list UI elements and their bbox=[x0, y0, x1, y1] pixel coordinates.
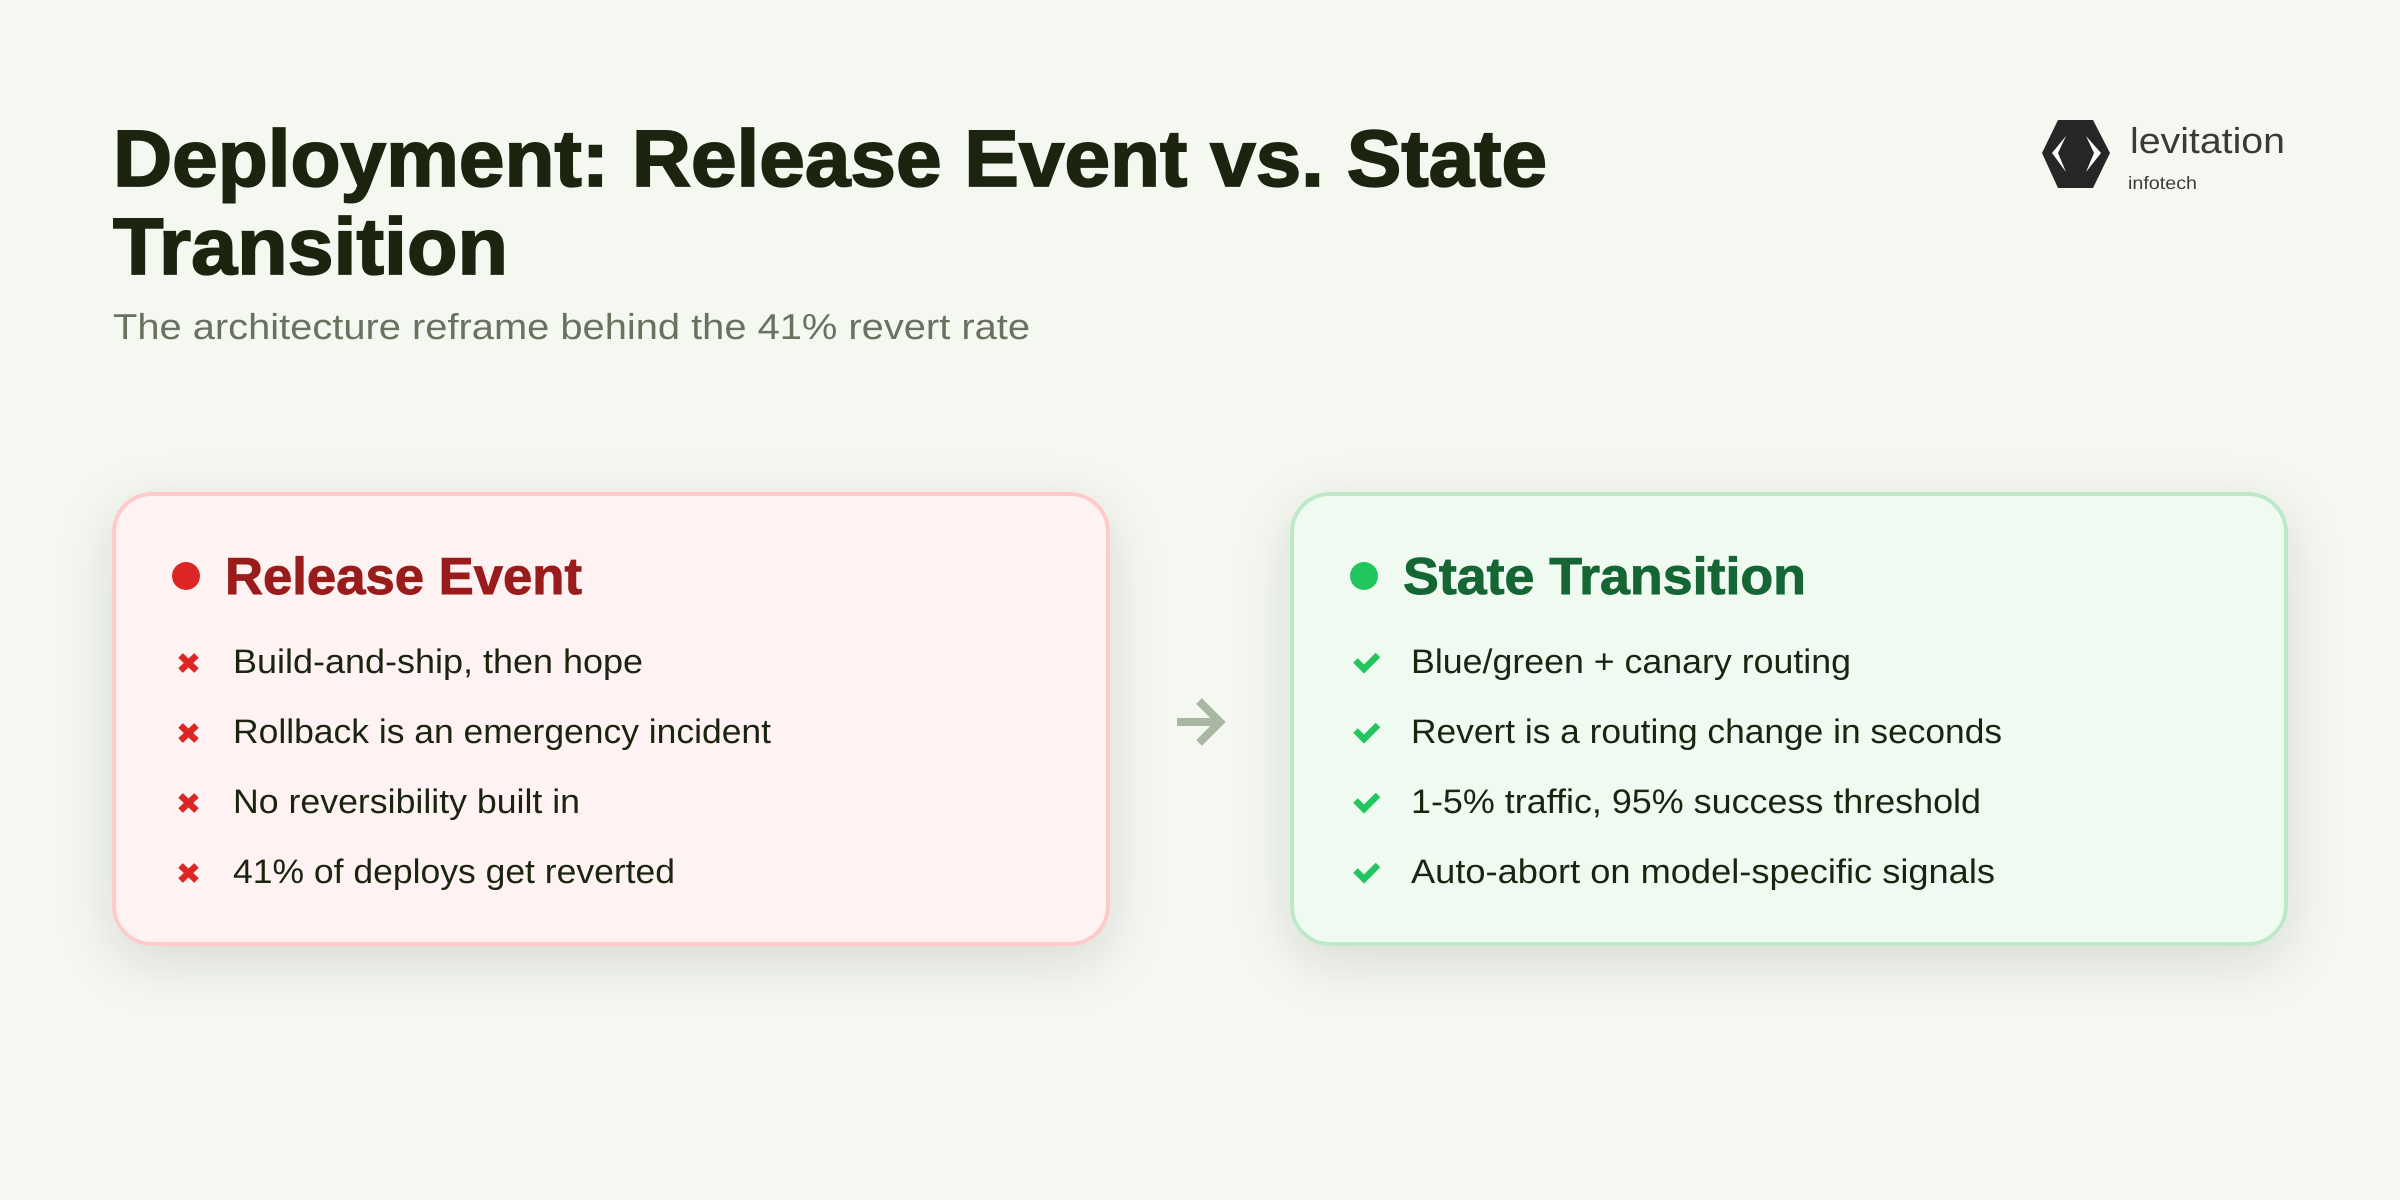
subtitle: The architecture reframe behind the 41% revert rate bbox=[113, 306, 1030, 347]
icon: hexagon with code chevrons bbox=[2042, 120, 2110, 188]
panel: state transition bbox=[1292, 494, 2286, 944]
list item: blue/green: Blue/green + canary routing bbox=[1411, 643, 1851, 681]
status dot: red bbox=[172, 562, 200, 590]
title: Deployment: Release Event vs. State bbox=[113, 114, 1547, 203]
panel background bbox=[1292, 494, 2286, 944]
list item: no reversibility: No reversibility built in bbox=[233, 783, 580, 821]
logo: levitation infotech bbox=[2042, 120, 2285, 193]
list item: build-and-ship: Build-and-ship, then hope bbox=[233, 643, 643, 681]
list item: rollback: Rollback is an emergency incident bbox=[233, 713, 772, 751]
status dot: green bbox=[1350, 562, 1378, 590]
heading: state transition: State Transition bbox=[1403, 548, 1806, 606]
logo sub-wordmark: infotech bbox=[2128, 173, 2197, 193]
panel: release event bbox=[114, 494, 1108, 944]
logo wordmark: levitation bbox=[2130, 120, 2285, 161]
title: Transition bbox=[113, 202, 508, 291]
arrow bbox=[1177, 701, 1220, 743]
heading: release event: Release Event bbox=[225, 548, 582, 606]
list item: revert routing: Revert is a routing change in seconds bbox=[1411, 713, 2002, 751]
list item: auto-abort: Auto-abort on model-specific signals bbox=[1411, 853, 1995, 891]
title bbox=[113, 114, 1547, 291]
list item: 41% reverted: 41% of deploys get reverted bbox=[233, 853, 675, 891]
panel background bbox=[114, 494, 1108, 944]
list item: traffic threshold: 1-5% traffic, 95% success threshold bbox=[1411, 783, 1981, 821]
